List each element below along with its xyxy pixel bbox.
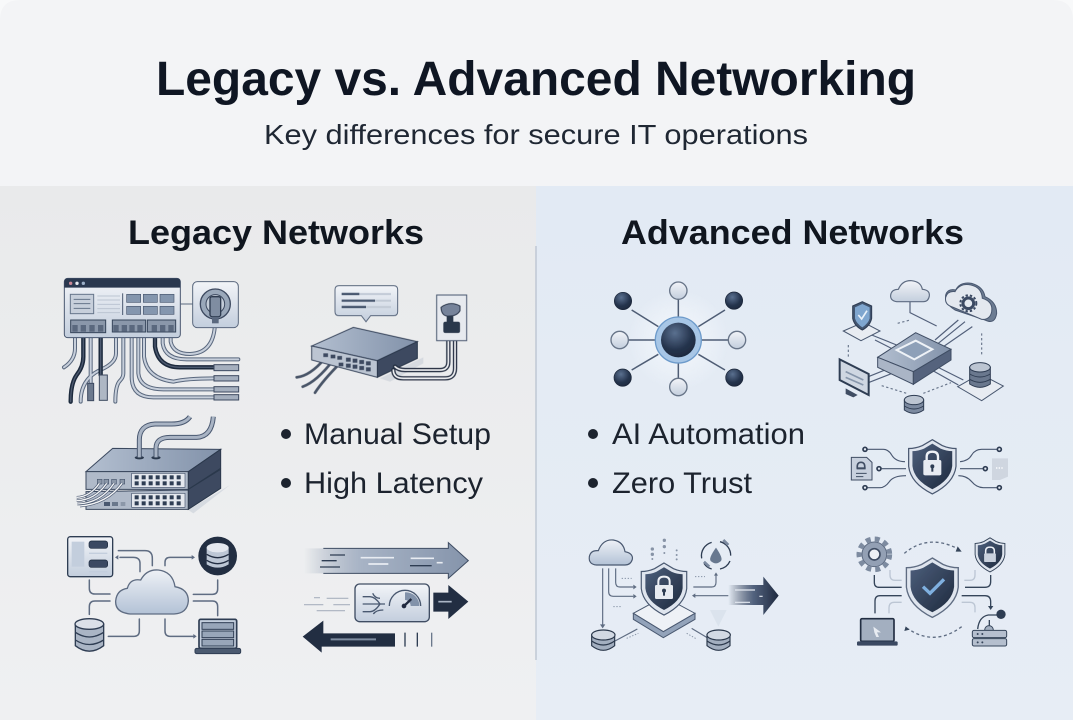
cloud — [116, 570, 188, 614]
monitor — [840, 359, 869, 397]
speed arrow — [728, 577, 779, 615]
small lock shield — [975, 538, 1005, 572]
icon: locked data platform — [589, 539, 779, 650]
icon: traffic flow arrows with speedometer — [303, 543, 468, 653]
heading: advanced networks: Advanced Networks — [621, 214, 964, 252]
speech bubble — [335, 286, 398, 322]
pad — [633, 597, 695, 632]
cloud — [589, 540, 632, 565]
small dark arrow — [433, 585, 468, 619]
laptop — [195, 619, 241, 654]
gear cloud — [945, 283, 997, 321]
subtitle: Key differences for secure IT operations — [264, 119, 808, 150]
database grey — [75, 619, 104, 651]
gear — [859, 539, 890, 570]
icon: hub-and-spoke node network — [611, 282, 746, 396]
heading: legacy networks: Legacy Networks — [128, 214, 424, 252]
title: Legacy vs. Advanced Networking — [156, 53, 916, 106]
icon: zero-trust lock shield — [851, 440, 1008, 494]
icon: hybrid cloud server topology — [840, 281, 1003, 413]
water-drop cycle — [701, 540, 731, 569]
advanced bullet list — [588, 418, 805, 500]
header panel — [0, 0, 1073, 186]
database dark — [198, 537, 237, 575]
advanced bullet list: AI Automation — [612, 418, 805, 451]
icon: patch panel with cables — [64, 278, 239, 402]
return arrow — [303, 621, 395, 653]
connector lines — [89, 551, 218, 636]
document card — [68, 537, 113, 577]
legacy bullet list: Manual Setup — [304, 418, 491, 451]
icon: policy shield with devices — [857, 538, 1007, 646]
icon: cloud hub with devices — [68, 537, 241, 654]
icon: network switch with speech bubble — [297, 286, 467, 393]
panel: advanced networks background — [536, 186, 1073, 720]
main shield — [906, 558, 958, 617]
database small — [904, 395, 924, 413]
database on pad — [958, 363, 1003, 401]
advanced bullet list: Zero Trust — [612, 467, 753, 500]
slow forward arrow — [304, 543, 468, 578]
outlet — [437, 295, 467, 341]
databases — [592, 630, 730, 650]
server node — [972, 610, 1007, 646]
central appliance — [878, 333, 951, 384]
legacy bullet list: High Latency — [304, 467, 483, 500]
cloud small — [891, 281, 929, 302]
panel: legacy networks background — [0, 186, 536, 720]
legacy bullet list — [281, 418, 491, 500]
laptop — [857, 619, 898, 646]
shield on pad — [843, 302, 880, 341]
speedometer box — [355, 584, 429, 622]
icon: stacked switches — [77, 417, 230, 513]
